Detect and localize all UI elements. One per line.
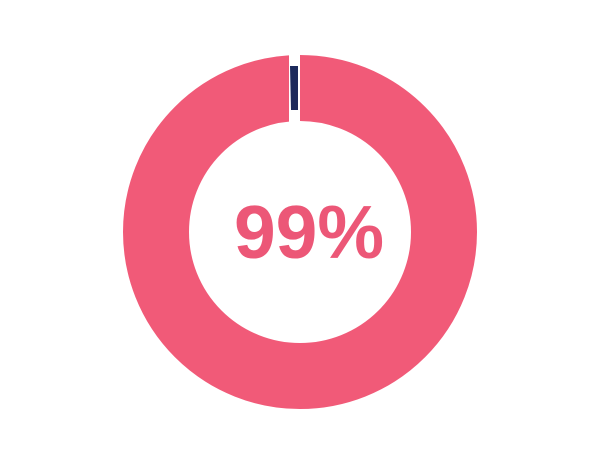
ring: 1% segment	[290, 66, 298, 110]
percentage label: 99%	[234, 190, 384, 274]
ring: 99% segment	[156, 88, 444, 376]
donut chart	[156, 48, 444, 376]
